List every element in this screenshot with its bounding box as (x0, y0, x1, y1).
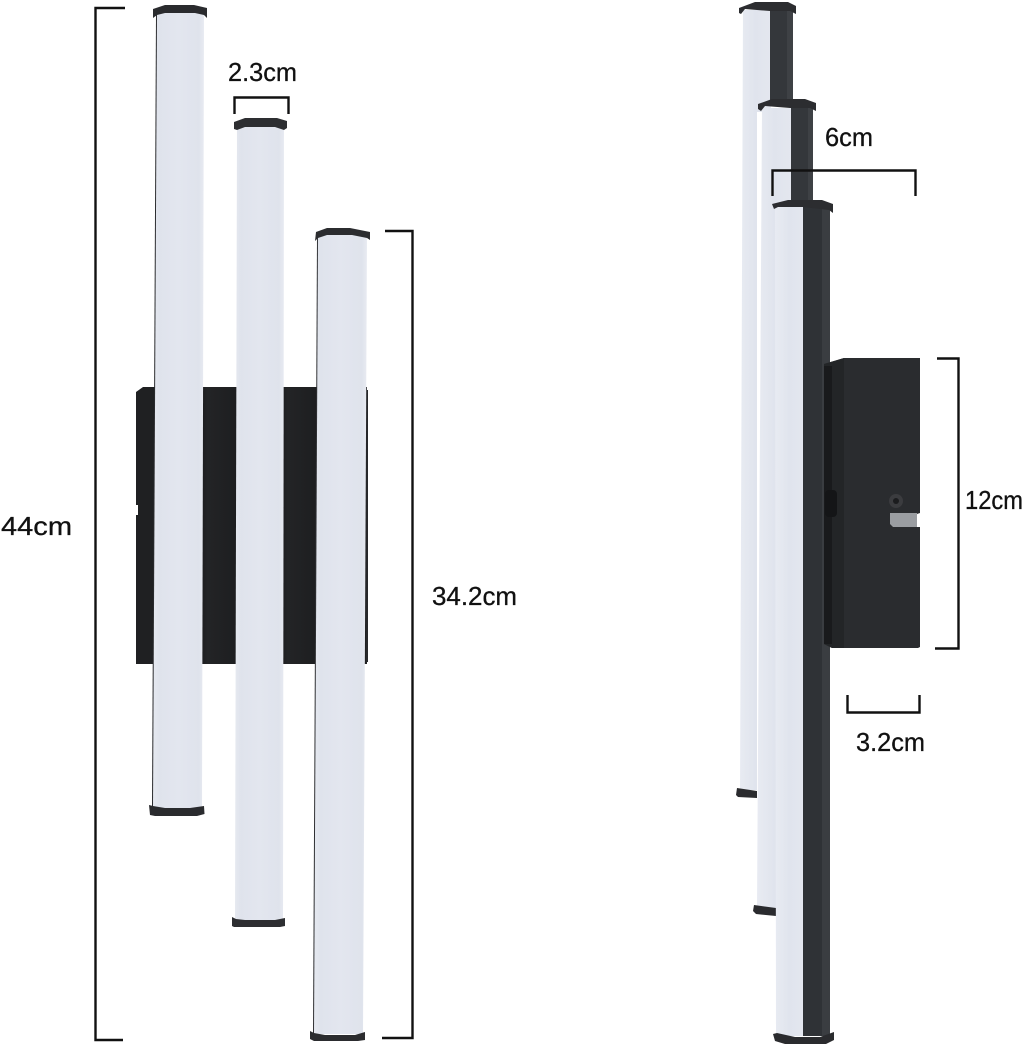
dimension: 12cm (935, 358, 1023, 648)
dimension: 2.3cm: 2.3cm (228, 57, 297, 87)
dimension: 6cm: 6cm (825, 122, 873, 152)
screw (889, 494, 903, 508)
knob (825, 490, 837, 517)
dimension: 44cm (1, 8, 125, 1040)
front tube (772, 200, 834, 1044)
tube 1 (149, 5, 207, 816)
back tube (736, 2, 796, 798)
dimension: 34.2cm: 34.2cm (432, 581, 517, 611)
side view lamp (736, 2, 921, 1044)
mounting plate (136, 387, 367, 664)
dimension: 34.2cm (382, 231, 517, 1038)
tube 2 (232, 118, 287, 927)
dimension: 3.2cm: 3.2cm (856, 727, 925, 757)
tube 3 (310, 228, 370, 1041)
notch (890, 513, 917, 527)
dimension: 6cm (772, 122, 916, 196)
dimension: 3.2cm (848, 695, 925, 757)
dimension: 2.3cm (228, 57, 297, 114)
front view lamp (136, 5, 370, 1041)
dimension: 44cm: 44cm (1, 511, 72, 541)
wall bracket (824, 358, 921, 648)
middle tube (753, 99, 816, 916)
